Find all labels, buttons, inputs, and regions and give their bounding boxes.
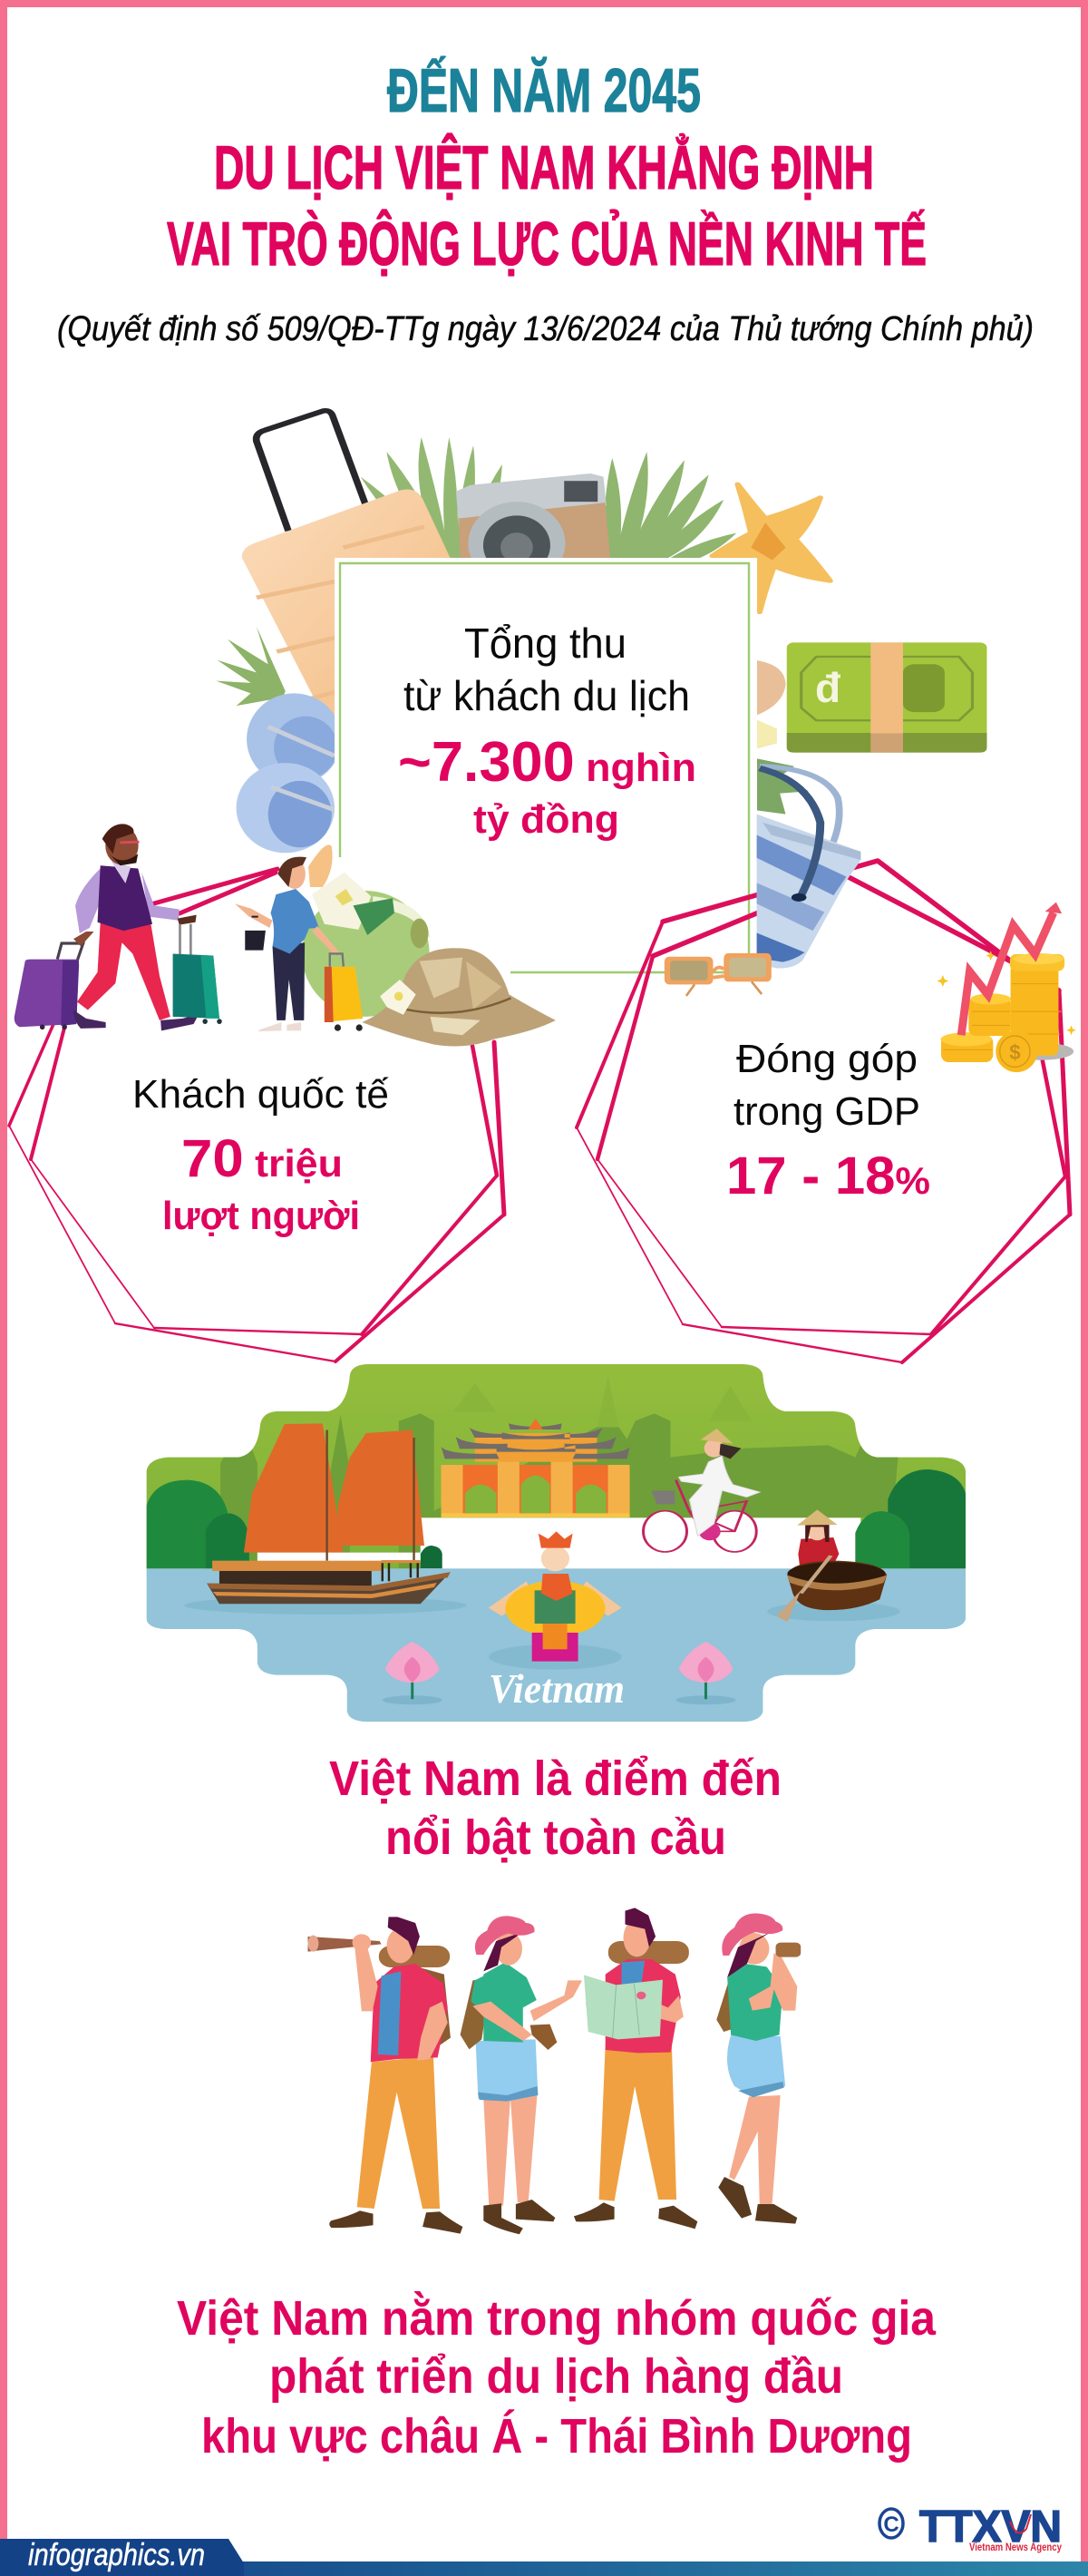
icon: woman with camera [461,1916,582,2234]
icon: flip flops [237,693,342,853]
text: card value: ~7.300 nghìn [398,731,696,794]
title: ĐẾN NĂM 2045 [387,55,701,125]
icon: dong symbol: đ [815,664,840,711]
icon: banknote bundle [787,642,986,753]
text: international visitors [132,1072,389,1238]
road [421,1517,860,1569]
illustration: gold coins and rising arrow: $ [1009,1041,1021,1064]
icon: lotus flowers [385,1642,733,1699]
icon: cyclist in ao dai [644,1429,760,1552]
icon: teal suitcase [173,924,222,1024]
text: GDP contribution: trong GDP [733,1089,920,1134]
heading: global destination [329,1751,782,1865]
icon: suitcase body [242,489,453,727]
text: card label: Tổng thu [464,620,627,667]
icon: coconut [302,873,430,1017]
heading: top tourism group: phát triển du lịch hàng đầu [269,2349,843,2404]
icon: palm leaves right [605,452,736,564]
icon: small palm [216,627,286,706]
faint skyline [607,1378,610,1386]
water [143,1568,969,1726]
icon: junk boat [207,1423,451,1604]
icon: camera [456,473,610,585]
footer tab with website: infographics.vn [28,2538,205,2572]
icon: purple suitcase [15,943,83,1029]
icon: starfish [713,484,831,612]
icon: palm leaves left [361,437,502,560]
icon: man with spyglass [308,1917,462,2234]
text: card value [398,731,696,842]
icon: coracle woman [776,1509,887,1622]
heading: top tourism group: khu vực châu Á - Thái Bình Dương [201,2409,912,2464]
text: card value: tỷ đồng [473,797,619,842]
icon: sun hat [362,948,556,1046]
icon: man traveller [73,824,199,1030]
illustration: travel items behind card [216,411,831,853]
illustration: four backpackers [308,1908,801,2234]
logo: TTXVN: Vietnam News Agency [969,2541,1062,2553]
logo: TTXVN: C [883,2513,899,2537]
icon: imperial gate [442,1419,630,1517]
text: card label: từ khách du lịch [403,672,690,719]
heading: global destination: Việt Nam là điểm đến [329,1751,782,1806]
heading: top tourism group [177,2291,937,2464]
text: international visitors: Khách quốc tế [132,1072,389,1117]
card: total revenue [335,558,757,984]
polygon frame: GDP contribution [577,861,1070,1362]
polygon frame: international visitors [9,869,504,1361]
text: GDP contribution [726,1037,930,1205]
text: international visitors: 70 triệu [181,1129,343,1188]
illustration: beach tote bag [757,766,860,969]
icon: woman with binoculars [716,1913,801,2224]
icon: woman traveller [235,857,339,1031]
heading: top tourism group: Việt Nam nằm trong nhóm quốc gia [177,2291,937,2346]
icon: yellow suitcase [325,953,363,1031]
icon: suitcase handle [257,411,365,531]
logo: TTXVN: TTXVN [919,2503,1062,2552]
icon: palm near tote [753,758,809,815]
text: card label [403,620,690,719]
icon: small flower [753,718,777,749]
bushes [147,1480,228,1568]
icon: shell [753,660,786,717]
icon: water puppet [489,1531,622,1662]
text: Vietnam script label: Vietnam [489,1665,625,1712]
silhouette buildings [220,1413,899,1568]
illustration: gold coins and rising arrow [937,903,1076,1072]
icon: man with map [574,1908,697,2229]
text: GDP contribution: Đóng góp [736,1037,918,1081]
footer bar [0,2538,1088,2576]
illustration: Vietnam landscape panel [143,1361,969,1726]
text: GDP contribution: 17 - 18% [726,1147,930,1205]
illustration: sunglasses [665,953,772,996]
text: international visitors: lượt người [162,1194,360,1238]
heading: global destination: nổi bật toàn cầu [385,1810,726,1865]
illustration: coconut, hat and travellers couple [15,824,556,1046]
icon: woman hair flower behind [308,844,333,887]
title [167,55,927,278]
